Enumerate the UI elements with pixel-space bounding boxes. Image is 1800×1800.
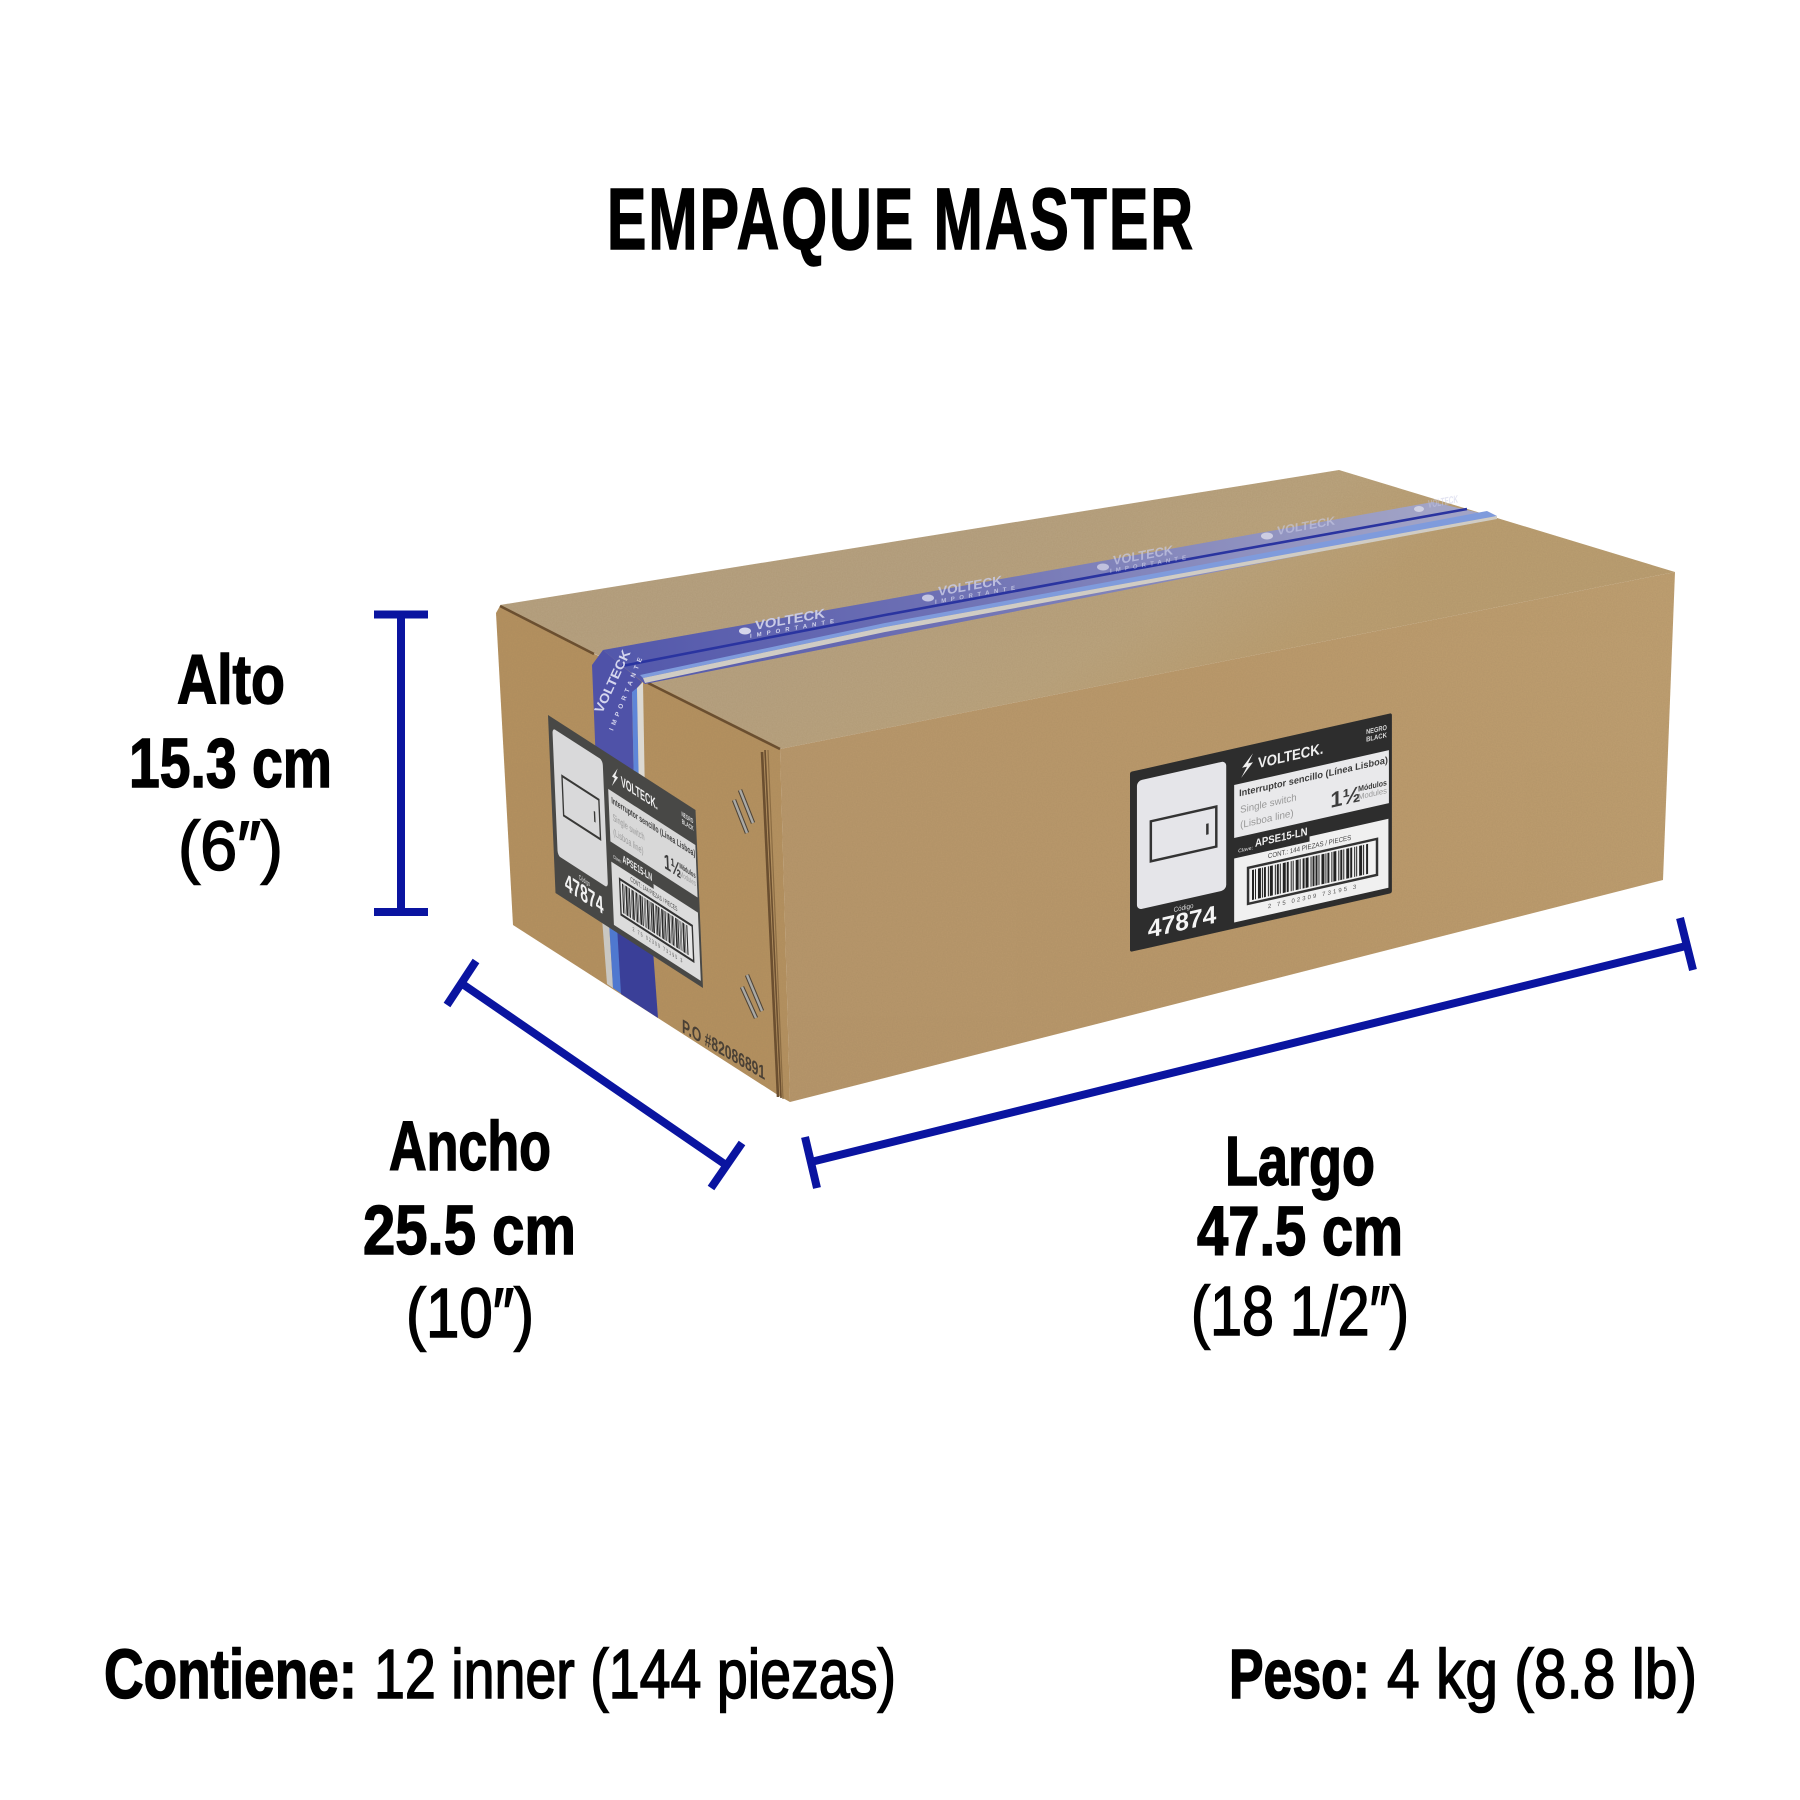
side label: 1½	[663, 848, 682, 884]
product key: Clave:	[1238, 845, 1253, 855]
length label: 47.5 cm	[1197, 1192, 1403, 1270]
height label: 15.3 cm	[129, 724, 332, 802]
colour tag	[1366, 724, 1388, 744]
product key: APSE15-LN	[1255, 826, 1308, 850]
side label	[548, 715, 703, 988]
colour tag: NEGRO	[1366, 725, 1387, 736]
title: EMPAQUE MASTER	[607, 171, 1195, 268]
height dimension bracket	[374, 614, 428, 912]
product description block: Single switch	[1240, 793, 1297, 816]
packing tape on side face: IMPORTANTE	[608, 656, 644, 732]
cardboard grain texture	[498, 606, 1476, 656]
packing tape on top face: VOLTECK	[1113, 542, 1174, 568]
side label: Interruptor sencillo (Línea Lisboa)	[611, 795, 696, 860]
packing tape on top face: IMPORTANTE	[750, 619, 834, 640]
length label	[1191, 1122, 1409, 1350]
packing tape on top face: VOLTECK	[938, 572, 1003, 599]
side label: Single switch	[612, 811, 645, 843]
contents note: 12 inner (144 piezas)	[374, 1635, 896, 1713]
contents note	[104, 1635, 896, 1713]
side label: 2 75 02309 73195 3	[632, 926, 683, 965]
top face of box	[500, 470, 1675, 749]
height label: (6″)	[178, 807, 283, 885]
packing tape on top face: IMPORTANTE	[1110, 555, 1186, 575]
side label: VOLTECK.	[621, 773, 658, 813]
width label: Ancho	[389, 1107, 551, 1185]
length label: Largo	[1225, 1122, 1375, 1200]
side label: APSE15-LN	[622, 853, 653, 884]
packing tape on side face: VOLTECK	[591, 647, 634, 715]
side label: CONT.: 144 PIEZAS / PIECES	[630, 877, 678, 914]
width label	[363, 1107, 576, 1352]
contents note: Contiene:	[104, 1635, 357, 1713]
width dimension bracket	[447, 961, 742, 1188]
photo: cardboard box	[490, 465, 1680, 1105]
weight note	[1229, 1635, 1697, 1713]
front long face of box	[780, 572, 1675, 1102]
product description block: Módulos	[1358, 778, 1387, 794]
side label: Módulos	[679, 862, 696, 881]
brand logo	[1241, 737, 1323, 778]
packing tape on top face: VOLTECK	[1428, 494, 1458, 511]
product description block: (Lisboa line)	[1240, 808, 1294, 831]
side label: NEGRO	[681, 811, 694, 826]
side label: (Lisboa line)	[613, 826, 644, 857]
label dark background	[1130, 713, 1392, 952]
packing tape on side face	[591, 647, 658, 1018]
switch plate icon	[1151, 807, 1216, 861]
colour tag: BLACK	[1366, 732, 1388, 744]
top flap seams	[500, 606, 783, 1099]
barcode block	[1234, 819, 1388, 923]
height label: Alto	[177, 640, 285, 718]
side label: Modules	[680, 870, 696, 889]
side label: Clave:	[613, 853, 622, 865]
weight note: 4 kg (8.8 lb)	[1387, 1635, 1697, 1713]
purchase order stamp: P.O #82086891	[682, 1016, 765, 1085]
product description block: 1½	[1330, 781, 1361, 813]
side label: Código	[579, 874, 591, 889]
packing tape on top face	[603, 494, 1497, 684]
product drawing panel	[1137, 761, 1226, 910]
packing tape on top face: VOLTECK	[1277, 514, 1335, 538]
product key	[1238, 826, 1308, 855]
staples	[734, 790, 762, 1018]
side label: 47874	[564, 868, 604, 920]
side face of box	[496, 606, 790, 1102]
packing tape on top face: VOLTECK	[755, 605, 826, 633]
brand logo: VOLTECK.	[1258, 741, 1323, 772]
side label: BLACK	[682, 819, 694, 834]
product code: 47874	[1148, 901, 1216, 944]
product description block: Interruptor sencillo (Línea Lisboa)	[1239, 755, 1388, 799]
width label: (10″)	[406, 1274, 534, 1352]
front label	[1130, 713, 1392, 952]
packing tape on top face: IMPORTANTE	[935, 586, 1015, 606]
width label: 25.5 cm	[363, 1191, 576, 1269]
barcode block: CONT.: 144 PIEZAS / PIECES	[1268, 835, 1351, 860]
product description block: Modules	[1358, 786, 1387, 802]
barcode block: 2 75 02309 73195 3	[1268, 884, 1357, 910]
length dimension bracket	[805, 918, 1693, 1188]
product description block	[1234, 750, 1389, 838]
product code: Código	[1174, 903, 1194, 914]
height label	[129, 640, 332, 885]
length label: (18 1/2″)	[1191, 1272, 1409, 1350]
weight note: Peso:	[1229, 1635, 1370, 1713]
